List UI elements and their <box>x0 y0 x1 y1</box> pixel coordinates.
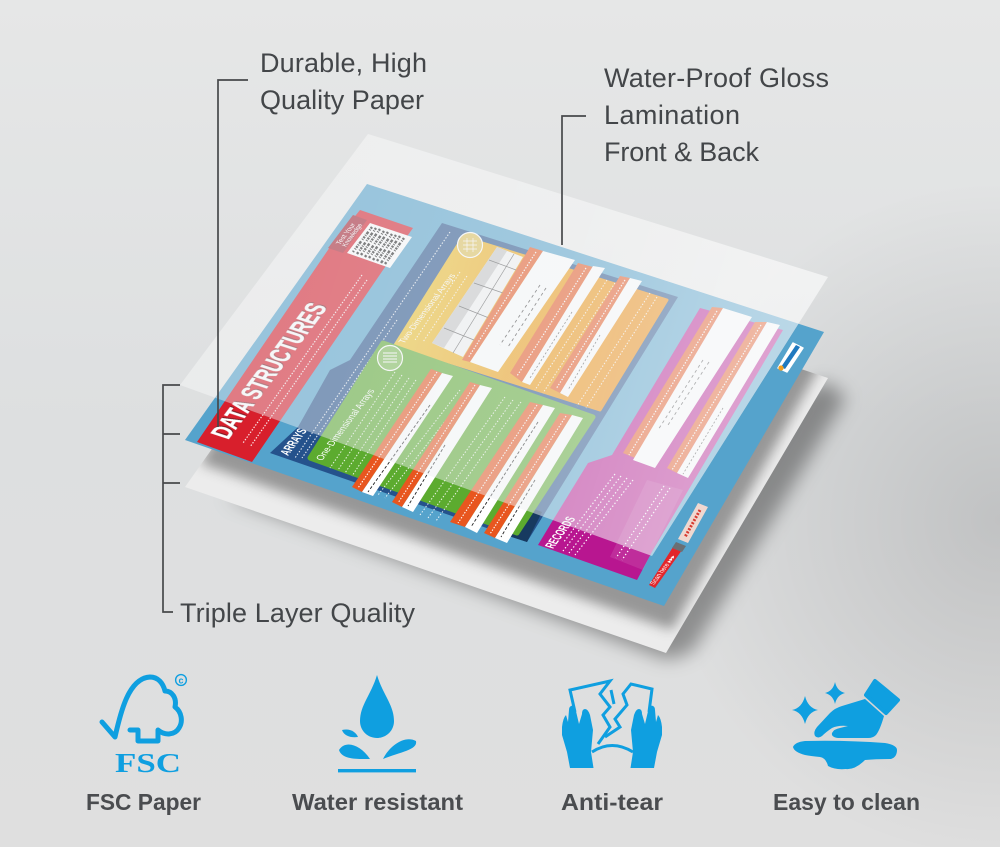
poster: data structures <box>185 184 824 606</box>
logo <box>778 343 803 372</box>
leader: durable paper <box>218 80 248 427</box>
heading: arrays: ARRAYS <box>277 427 310 457</box>
icon: water drop <box>338 675 416 772</box>
callout: durable paper: Durable, High <box>260 48 427 78</box>
icon: hands tearing paper <box>562 681 662 768</box>
panel: one-dimensional arrays <box>310 343 593 543</box>
callout: water-proof lamination: Lamination <box>604 100 740 130</box>
poster background <box>185 184 824 606</box>
strip: records code one <box>623 307 752 468</box>
icon: hand wiping with sparkles <box>792 681 898 769</box>
callout: durable paper: Quality Paper <box>260 85 424 115</box>
callout: triple layer quality: Triple Layer Quality <box>180 598 416 628</box>
label: anti-tear: Anti-tear <box>561 789 663 815</box>
feature: fsc paper <box>86 675 201 815</box>
shadow of poster on the lower sheet <box>199 370 822 635</box>
strip: code example two <box>510 263 605 385</box>
qr code <box>347 223 412 268</box>
table <box>432 247 523 357</box>
strip: green code two <box>392 382 492 512</box>
bracket: triple layer <box>163 385 180 612</box>
heading: two-dimensional arrays: Two-Dimensional Arrays <box>396 272 458 345</box>
strip: code example one <box>462 247 575 372</box>
icon: fsc tree logo <box>102 675 186 778</box>
leader: water-proof lamination <box>562 116 586 245</box>
label: fsc paper: FSC Paper <box>86 789 201 815</box>
heading: one-dimensional arrays: One-Dimensional Arrays <box>314 388 378 462</box>
feature: anti-tear <box>561 681 663 815</box>
shadow under the lower sheet <box>225 382 846 660</box>
button: scan here: Scan here ▸▸▸ <box>649 554 678 586</box>
label: water resistant: Water resistant <box>292 789 463 815</box>
strip: green code three <box>450 402 555 533</box>
panel: records <box>538 307 783 580</box>
icon: table badge <box>458 232 482 258</box>
feature: easy to clean <box>773 681 920 815</box>
heading: records: RECORDS <box>542 515 579 550</box>
icon: list badge <box>378 346 402 370</box>
strip: records code two <box>667 322 780 478</box>
icon: fsc tree logo: FSC <box>115 748 181 778</box>
tag: test your knowledge: Test Your <box>335 222 358 246</box>
callout: durable paper <box>260 48 427 115</box>
feature: water resistant <box>292 675 463 815</box>
poster tint under the laminate <box>215 184 799 556</box>
layer: bottom laminate sheet <box>185 225 828 653</box>
tag: test your knowledge <box>328 215 367 253</box>
panel: arrays <box>270 223 678 542</box>
strip: green code one <box>352 369 453 496</box>
strip: green code four <box>484 413 583 543</box>
arrays intro text <box>295 232 450 458</box>
records text <box>563 474 670 560</box>
icon: fsc tree logo: c <box>178 676 184 686</box>
callout: water-proof lamination: Front & Back <box>604 137 760 167</box>
records side box <box>610 480 683 570</box>
tag: test your knowledge: Knowledge <box>341 223 365 248</box>
banner: red title strip <box>197 210 413 462</box>
one-dimensional arrays text <box>330 372 521 521</box>
panel: two-dimensional arrays <box>395 232 667 410</box>
callout: water-proof lamination <box>604 63 829 167</box>
small qr and form strip <box>672 503 708 552</box>
strip: code example three <box>550 276 642 397</box>
layer: top gloss lamination sheet <box>180 134 828 556</box>
banner intro text <box>243 275 367 447</box>
callout: water-proof lamination: Water-Proof Gloss <box>604 63 829 93</box>
label: easy to clean: Easy to clean <box>773 789 920 815</box>
two-dimensional arrays text <box>415 272 657 408</box>
title: data structures: DATA STRUCTURES <box>204 299 333 442</box>
